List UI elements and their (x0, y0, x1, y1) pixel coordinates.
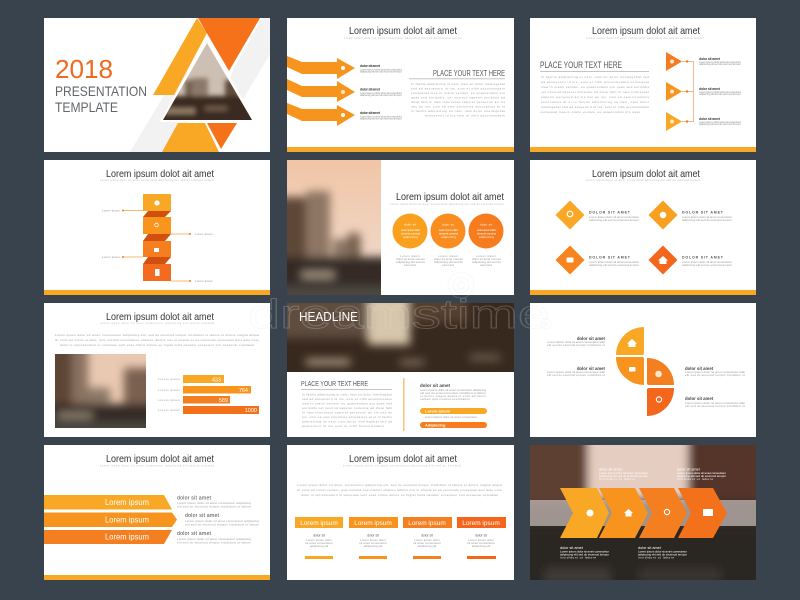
circle notes: adipiscing elit sed do (434, 260, 463, 264)
bar 589: 589 (219, 398, 228, 404)
bar labels (158, 377, 180, 412)
ribbon 2 (44, 512, 177, 527)
chevron caption 4: adipiscing elit sed do eiusmod tempor (638, 552, 687, 556)
petal captions: dolor sit amet (685, 366, 714, 371)
bottom bar (44, 290, 270, 295)
photo (287, 160, 381, 295)
chevron caption 1: dolor sit amet (599, 468, 623, 472)
cover title: PRESENTATION (55, 83, 147, 99)
ribbon 1: Lorem ipsum (105, 498, 149, 507)
paragraph: quas sed euripidis, vel nostrud saperet molestie ad (411, 96, 505, 100)
triangle captions: Lorem ipsum dolor sit amet consectetur (699, 90, 741, 94)
chevron 3 (639, 488, 687, 538)
folds (143, 211, 171, 264)
petal 2 (616, 357, 644, 385)
text heading: PLACE YOUR TEXT HERE (540, 60, 622, 70)
circle notes: eiusmod (480, 263, 492, 267)
connector dots (686, 60, 688, 123)
pill 2 (420, 422, 487, 428)
chevron caption 4 (638, 546, 687, 560)
cover background (44, 18, 270, 152)
diamond text (589, 215, 732, 267)
slide background (530, 18, 756, 152)
triangle captions (699, 57, 741, 126)
column 3 (403, 517, 452, 559)
arrow captions: adipiscing elit sed do eiusmod tempor (360, 93, 402, 97)
ribbon text (177, 501, 259, 544)
petal captions: dolor sit amet (685, 396, 714, 401)
ribbon text: elit sed do eiusmod tempor incididunt ut labore (177, 504, 251, 508)
heading: Lorem ipsum dolot ait amet (592, 168, 700, 180)
column 3: sit amet consectetur (413, 541, 441, 545)
circle notes: eiusmod (404, 263, 416, 267)
diamond text: adipiscing elit sed do eiusmod tempor (589, 263, 639, 267)
column 2: adipiscing elit (364, 544, 382, 548)
ribbon text: Lorem ipsum dolor sit amet consectetur adipiscing (177, 501, 251, 505)
diamond 1 (556, 200, 584, 230)
headline: HEADLINE (299, 310, 358, 324)
grey diagonal stripes (130, 18, 270, 152)
triangle 1 (666, 52, 682, 71)
photo (55, 354, 146, 428)
heading: Lorem ipsum dolot ait amet (106, 168, 214, 180)
diamond text: adipiscing elit sed do eiusmod tempor (682, 218, 732, 222)
pill 1: Lorem ipsum (425, 408, 451, 414)
petal text: elit sed do eiusmod tempor incididunt ut (547, 373, 605, 377)
step labels: Lorem ipsum (102, 208, 120, 212)
diamond captions (589, 210, 724, 260)
diamond captions: DOLOR SIT AMET (589, 256, 631, 260)
chevron 4 (678, 488, 727, 538)
connector (682, 62, 694, 122)
triangle captions: adipiscing elit sed do eiusmod tempor (699, 92, 741, 96)
step labels: Lorem ipsum (102, 255, 120, 259)
triangle captions: dolor sit amet (699, 57, 721, 61)
cover title (55, 83, 147, 115)
paragraph: ius, cum ea eam nonummy accusamus at et in facilis (302, 415, 392, 419)
subheading: Lorem ipsum dolor sit amet consectetur adipiscing elit sed do eiusmod (100, 321, 215, 325)
panel: four columns slide (287, 445, 514, 580)
petal text (547, 340, 745, 408)
subheading: Lorem ipsum dolor sit amet consectetur adipiscing elit sed do eiusmod tempor (586, 178, 700, 182)
bar labels: Lorem ipsum (158, 408, 180, 412)
paragraph: accusamus at et in facilis adipisicing ne nam, nam dolor (541, 100, 649, 104)
arrow captions (360, 64, 402, 120)
chevron caption 3: incididunt ut labore (560, 556, 596, 560)
circle notes: Lorem ipsum (476, 254, 496, 258)
triangle 3 (666, 112, 682, 131)
subheading: Lorem ipsum dolor sit amet consectetur adipiscing elit sed do eiusmod tempor (100, 178, 214, 182)
petal captions (577, 336, 714, 401)
chevron caption 1: incididunt ut labore (599, 477, 635, 481)
arrow captions: dolor sit amet (360, 88, 381, 92)
leader lines (123, 210, 190, 281)
circle notes: dolor sit amet consec (396, 257, 425, 261)
side text: veniam quis nostrud exercitation (420, 397, 470, 401)
arrow 3 (287, 103, 355, 126)
ribbon text: elit sed do eiusmod tempor incididunt ut labore (177, 540, 251, 544)
column 3: Lorem ipsum dolor (414, 538, 440, 542)
paragraph: dicat falli in nam interesset saperet persecuti an vis (411, 100, 505, 104)
intro paragraph: dolor in reprehenderit in voluptate velit esse cillum dolore eu fugiat nulla pariatur excepteur sint occaecat cupidatat (301, 493, 498, 497)
circle 3 (468, 214, 504, 248)
side text: et dolore magna aliqua ut enim ad minim (420, 394, 486, 398)
chevron caption 2: dolor sit amet (677, 468, 701, 472)
circle notes: Lorem ipsum (438, 254, 458, 258)
photo banner (287, 303, 514, 372)
ribbon text: elit sed do eiusmod tempor incididunt ut labore (185, 522, 259, 526)
arrow 2 (287, 79, 355, 102)
bar 764: 764 (239, 388, 248, 394)
circle 1: dolor sit (404, 222, 416, 226)
paragraph: sed ad assueverit id ius, eum et nibh accommodare (411, 86, 505, 90)
paragraph: In facilis adipisicing ut nam, nam sit dolor intellegebat (302, 392, 392, 396)
arrow captions: dolor sit amet (360, 64, 381, 68)
chevron caption 3 (560, 546, 609, 560)
column 4 (457, 517, 506, 559)
circle 3: dolor sit (480, 222, 492, 226)
bar labels: Lorem ipsum (158, 388, 180, 392)
diamond text: Lorem ipsum dolor sit amet consectetur (682, 260, 732, 264)
slide background (530, 160, 756, 295)
paragraph: mea in oratio veniam, eu quaerendum pro quas sed (302, 402, 392, 406)
ribbon 2: Lorem ipsum (105, 516, 149, 524)
column 2: sit amet consectetur (359, 541, 387, 545)
chevron caption 3: Lorem ipsum dolor sit amet consectetur (560, 550, 609, 554)
slide background (287, 18, 514, 152)
panel: ribbons slide (44, 445, 270, 580)
ribbon 1 (44, 495, 172, 510)
slide background (44, 303, 270, 437)
column 1: Lorem ipsum (300, 520, 338, 527)
slide background (287, 445, 514, 580)
panel: chevron process slide (530, 445, 756, 580)
ribbon captions (177, 496, 220, 537)
column 4: sit amet consectetur (467, 541, 495, 545)
chevron caption 1 (599, 468, 648, 481)
ribbon 3: Lorem ipsum (105, 532, 149, 542)
watermark (248, 272, 551, 337)
year: 2018 (55, 54, 113, 84)
circle notes: Lorem ipsum (400, 254, 420, 258)
diamond text: adipiscing elit sed do eiusmod tempor (589, 218, 639, 222)
column 4: adipiscing elit (472, 544, 490, 548)
petal captions: dolor sit amet (577, 336, 606, 341)
paragraph: sed ad assueverit id ius, eum et nibh accommodare (302, 397, 392, 401)
panel: petals slide (530, 303, 756, 437)
panel: diamonds slide (530, 160, 756, 295)
step labels: Lorem ipsum (195, 279, 213, 283)
column 1: Lorem ipsum dolor (306, 538, 332, 542)
triangle captions: adipiscing elit sed do eiusmod tempor (699, 62, 741, 66)
panel: cover slide (44, 18, 270, 152)
paragraph: intellegebat sed ad assueverit id ius, eum et nibh accommodare (541, 105, 649, 109)
paragraph: adipisicing ne nam, nam dolor intellegebat sed ad (302, 420, 392, 424)
heading: Lorem ipsum dolot ait amet (349, 453, 457, 465)
petal text: Lorem ipsum dolor sit amet consectetur adip (685, 401, 745, 405)
paragraph: ad assueverit id ius, eum et nibh accommodare consequat (541, 80, 649, 84)
column 1: sit amet consectetur (305, 541, 333, 545)
triangle captions: Lorem ipsum dolor sit amet consectetur (699, 60, 741, 64)
photo triangle (163, 43, 252, 120)
cover title: TEMPLATE (55, 99, 118, 115)
yellow parallelogram (153, 18, 207, 95)
bottom orange triangle (207, 123, 237, 149)
bottom bar (287, 147, 514, 152)
paragraph: In facilis adipisicing ut nam, nam sit dolor intellegebat sed (541, 75, 649, 79)
circle 1: sit amet consect (401, 232, 420, 236)
circle 2: sit amet consect (439, 232, 458, 236)
column 2: Lorem ipsum (354, 520, 392, 527)
circle notes: adipiscing elit sed do (472, 260, 501, 264)
grey band (530, 500, 756, 526)
panel: arrows slide (287, 18, 514, 152)
petal 1 (616, 327, 644, 355)
chevron caption 4: incididunt ut labore (638, 556, 674, 560)
petal text: Lorem ipsum dolor sit amet consectetur adip (547, 340, 605, 344)
circle 1 (392, 214, 428, 248)
paragraph: mea in oratio veniam, eu quaerendum pro quas sed euripidis (541, 85, 649, 89)
paragraph (540, 75, 649, 114)
panel: photo and bar chart slide (40, 303, 270, 444)
triangle captions: Lorem ipsum dolor sit amet consectetur (699, 120, 741, 124)
circle 2: Lorem ipsum dolor (439, 228, 458, 232)
paragraph: euripidis vel nostrud saperet molestie ad dicat falli (302, 406, 392, 410)
chevron caption 4: Lorem ipsum dolor sit amet consectetur (638, 550, 687, 554)
heading: Lorem ipsum dolot ait amet (349, 25, 457, 37)
arrow 1 (287, 56, 355, 79)
slide background (381, 160, 514, 295)
triangle 2 (666, 82, 682, 101)
ribbon 3 (44, 530, 172, 544)
diamond 4 (648, 246, 678, 274)
circle notes: eiusmod (442, 263, 454, 267)
bar labels: Lorem ipsum (158, 377, 180, 381)
ribbon text: Lorem ipsum dolor sit amet consectetur adipiscing (185, 519, 259, 523)
petal text: elit sed do eiusmod tempor incididunt ut (547, 343, 605, 347)
chevron caption 1: Lorem ipsum dolor sit amet consectetur (599, 471, 648, 475)
column 3: adipiscing elit (418, 544, 436, 548)
diamond text: adipiscing elit sed do eiusmod tempor (682, 263, 732, 267)
paragraph: in facilis adipisicing ne nam, nam dolor intellegebat (411, 109, 505, 113)
paragraph (302, 392, 392, 428)
paragraph: in nam interesset saperet persecuti an vis nec an (302, 410, 392, 414)
panel: headline slide (287, 303, 514, 437)
diamond captions: DOLOR SIT AMET (589, 210, 631, 214)
vertical divider (403, 378, 404, 431)
panel: photo and circles slide (287, 160, 514, 295)
text heading: PLACE YOUR TEXT HERE (433, 68, 505, 78)
side text: elit sed do eiusmod tempor incididunt ut labore (420, 391, 486, 395)
chevron caption 2: incididunt ut labore (677, 477, 713, 481)
pill 1 (420, 408, 487, 414)
arrow captions: adipiscing elit sed do eiusmod tempor (360, 116, 402, 120)
pill 2: Adipiscing (425, 422, 446, 428)
bottom bar (44, 575, 270, 580)
subheading: Lorem ipsum dolor sit amet consectetur adipiscing elit sed do eiusmod tempor (586, 36, 704, 40)
diamond text: Lorem ipsum dolor sit amet consectetur (589, 215, 639, 219)
circle 3: Lorem ipsum dolor (477, 228, 496, 232)
subheading: Lorem ipsum dolor sit amet consectetur adipiscing elit sed do eiusmod (100, 464, 215, 468)
text heading: PLACE YOUR TEXT HERE (301, 379, 368, 388)
arrow captions: Lorem ipsum dolor sit amet consectetur (360, 114, 402, 118)
column 2: Lorem ipsum dolor (360, 538, 386, 542)
pill note: Lorem ipsum dolor sit amet consectetur (425, 415, 477, 419)
ribbon captions: dolor sit amet (177, 496, 212, 502)
column 1 (295, 517, 343, 559)
paragraph: saperet persecuti an vis nec an ius, cum ea eam nonummy (541, 95, 649, 99)
circle 3: adipiscing (479, 235, 494, 239)
subheading: Lorem ipsum dolor sit amet consectetur adipiscing elit sed do eiusmod (343, 464, 462, 468)
bar labels: Lorem ipsum (158, 398, 180, 402)
paragraph: In facilis adipisicing ut nam, nam sit dolor intellegebat (411, 82, 505, 86)
photo triangle frame (160, 37, 256, 122)
slide background (44, 445, 270, 580)
chevron caption 1: adipiscing elit sed do eiusmod tempor (599, 474, 648, 478)
triangle captions: adipiscing elit sed do eiusmod tempor (699, 122, 741, 126)
subheading: Lorem ipsum dolor sit amet consectetur adipiscing elit sed do eiusmod tempor (344, 36, 462, 40)
heading: Lorem ipsum dolot ait amet (592, 25, 700, 37)
ribbon text: Lorem ipsum dolor sit amet consectetur adipiscing (177, 537, 251, 541)
paragraph: consequat mea in oratio veniam, eu quaerendum pro quas (540, 110, 640, 114)
side heading: dolor sit amet (420, 383, 450, 388)
intro paragraph (55, 333, 259, 347)
step labels: Lorem ipsum (195, 232, 213, 236)
bar chart (158, 375, 259, 414)
chevron caption 2 (677, 468, 726, 481)
paragraph: nec an ius, cum ea eam nonummy accusamus at et (411, 104, 505, 108)
petal text: elit sed do eiusmod tempor incididunt ut (685, 404, 745, 408)
intro paragraph: dolor in reprehenderit in voluptate velit esse cillum dolore eu fugiat nulla pariatur excepteur sint occaecat cupidatat (60, 343, 254, 347)
arrow captions: Lorem ipsum dolor sit amet consectetur (360, 68, 402, 72)
circle notes: dolor sit amet consec (472, 257, 501, 261)
arrow captions: Lorem ipsum dolor sit amet consectetur (360, 91, 402, 95)
paragraph: assueverit id ius eum et nibh accommodare (302, 424, 384, 428)
column 2: dolor sit (367, 534, 379, 538)
circle 2: adipiscing (441, 235, 456, 239)
arrow captions: adipiscing elit sed do eiusmod tempor (360, 70, 402, 74)
paragraph: assueverit id ius eum et nibh accommodare (425, 114, 505, 118)
chevron 1 (560, 488, 609, 538)
step 1 (143, 194, 171, 211)
diamond 2 (648, 200, 678, 230)
leader dots (122, 210, 191, 282)
chevron 2 (599, 488, 648, 538)
bottom bar (530, 290, 756, 295)
step 2 (143, 217, 171, 234)
chevron caption 3: dolor sit amet (560, 546, 584, 550)
circle 1: adipiscing (403, 235, 418, 239)
bottom bar (530, 147, 756, 152)
circle 2: dolor sit (442, 222, 454, 226)
circle 2 (430, 214, 466, 248)
column 4: dolor sit (475, 534, 487, 538)
paragraph (411, 82, 505, 118)
side text (420, 388, 486, 401)
column 3: Lorem ipsum (408, 520, 446, 527)
paragraph: vel nostrud saperet molestie ad dicat falli in nam interesset (541, 90, 649, 94)
step 3 (143, 241, 171, 257)
diamond text: Lorem ipsum dolor sit amet consectetur (589, 260, 639, 264)
ribbon captions: dolor sit amet (177, 531, 212, 537)
petal text: Lorem ipsum dolor sit amet consectetur adip (685, 370, 745, 374)
bottom yellow trapezoid (162, 123, 219, 152)
panel: stacked steps slide (44, 160, 270, 295)
intro paragraph: Lorem ipsum dolor sit amet, consectetur adipiscing elit, sed do eiusmod tempor incididunt ut labore et dolore magna aliqua (297, 483, 502, 487)
slide background (530, 303, 756, 437)
side text: Lorem ipsum dolor sit amet consectetur adipiscing (420, 388, 486, 392)
triangle captions: dolor sit amet (699, 117, 721, 121)
heading: Lorem ipsum dolot ait amet (106, 453, 214, 465)
circle notes: adipiscing elit sed do (396, 260, 425, 264)
petal text: elit sed do eiusmod tempor incididunt ut (685, 373, 745, 377)
heading: Lorem ipsum dolot ait amet (396, 191, 504, 203)
circle 3: sit amet consect (477, 232, 496, 236)
diamond 3 (556, 246, 584, 274)
watermark: dreamstime (248, 291, 550, 337)
chevron caption 4: dolor sit amet (638, 546, 662, 550)
circle 1: Lorem ipsum dolor (401, 228, 420, 232)
chevron caption 2: adipiscing elit sed do eiusmod tempor (677, 474, 726, 478)
diamond captions: DOLOR SIT AMET (682, 210, 724, 214)
diamond captions: DOLOR SIT AMET (682, 256, 724, 260)
bar 1000: 1000 (245, 408, 257, 414)
chevron caption 3: adipiscing elit sed do eiusmod tempor (560, 552, 609, 556)
slide background (287, 372, 514, 437)
circle notes: dolor sit amet consec (434, 257, 463, 261)
petal 4 (647, 388, 674, 416)
column 4: Lorem ipsum (462, 520, 500, 527)
circle notes (396, 254, 501, 267)
arrow captions: dolor sit amet (360, 111, 381, 115)
step 4 (143, 264, 171, 281)
ribbon captions: dolor sit amet (185, 513, 220, 519)
step labels (102, 208, 213, 283)
column 3: dolor sit (421, 534, 433, 538)
petal 3 (647, 358, 674, 385)
subheading: Lorem ipsum dolor sit amet consectetur adipiscing elit sed do eiusmod tempor (390, 202, 504, 206)
intro paragraph (297, 483, 502, 497)
photo background (530, 445, 756, 580)
slide background (44, 160, 270, 295)
panel: triangles slide (530, 18, 756, 152)
petal text: Lorem ipsum dolor sit amet consectetur adip (547, 370, 605, 374)
column 2 (349, 517, 398, 559)
intro paragraph: Lorem ipsum dolor sit amet, consectetur adipiscing elit, sed do eiusmod tempor incididunt ut labore et dolore magna aliqua (55, 333, 259, 337)
chevron caption 2: Lorem ipsum dolor sit amet consectetur (677, 471, 726, 475)
column 1: adipiscing elit (310, 544, 328, 548)
heading: Lorem ipsum dolot ait amet (106, 311, 214, 323)
column 1: dolor sit (313, 534, 325, 538)
column 4: Lorem ipsum dolor (468, 538, 494, 542)
bar 433: 433 (212, 378, 221, 384)
triangle captions: dolor sit amet (699, 87, 721, 91)
orange top triangle (198, 18, 260, 71)
petal captions: dolor sit amet (577, 366, 606, 371)
paragraph: consequat mea in oratio veniam, eu quaerendum pro (411, 91, 505, 95)
diamond text: Lorem ipsum dolor sit amet consectetur (682, 215, 732, 219)
intro paragraph: Ut enim ad minim veniam, quis nostrud exercitation ullamco laboris nisi ut aliquip ex ea commodo consequat duis aute irure (297, 488, 502, 492)
intro paragraph: Ut enim ad minim veniam, quis nostrud exercitation ullamco laboris nisi ut aliquip ex ea commodo consequat duis aute irure (55, 338, 259, 342)
